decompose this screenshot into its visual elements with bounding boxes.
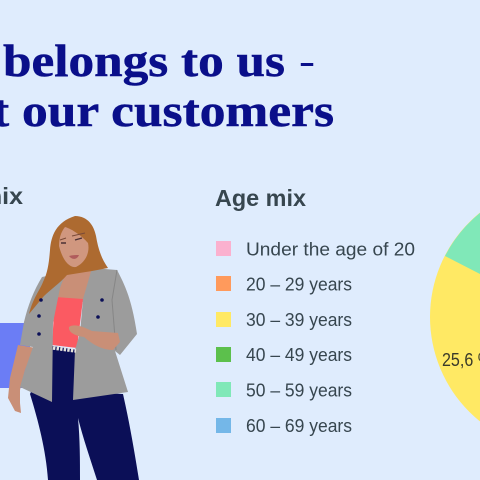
hand and forearm [69, 325, 120, 350]
chain belt [53, 348, 76, 351]
heading: age mix: Age mix [215, 185, 306, 211]
facial features [60, 233, 85, 259]
title: t our customers [0, 86, 334, 136]
blazer [20, 268, 137, 402]
hair [29, 216, 108, 314]
legend item: 30-39: 30 – 39 years [246, 309, 352, 330]
legend item: under 20: Under the age of 20 [246, 238, 415, 260]
face [59, 227, 88, 267]
slice: 50-59 years [445, 183, 480, 317]
red top [52, 297, 83, 348]
legend item: 50-59: 50 – 59 years [246, 380, 352, 400]
illustration: woman in grey blazer [8, 216, 139, 480]
neck and chest [54, 258, 93, 302]
trousers [30, 346, 139, 480]
blazer buttons [37, 298, 104, 336]
blazer sleeve seam [112, 270, 117, 350]
legend item: 60-69: 60 – 69 years [246, 415, 352, 436]
legend item: 40-49: 40 – 49 years [246, 344, 352, 365]
left arm [8, 345, 36, 413]
legend: age groups [216, 238, 415, 436]
title [0, 36, 334, 136]
pie chart [430, 183, 480, 451]
title: - [299, 38, 315, 83]
title: belongs to us [3, 36, 285, 86]
bar: blue chart segment [0, 323, 30, 388]
legend item: 20-29: 20 – 29 years [246, 274, 352, 294]
slice: 30-39 years [430, 183, 480, 451]
